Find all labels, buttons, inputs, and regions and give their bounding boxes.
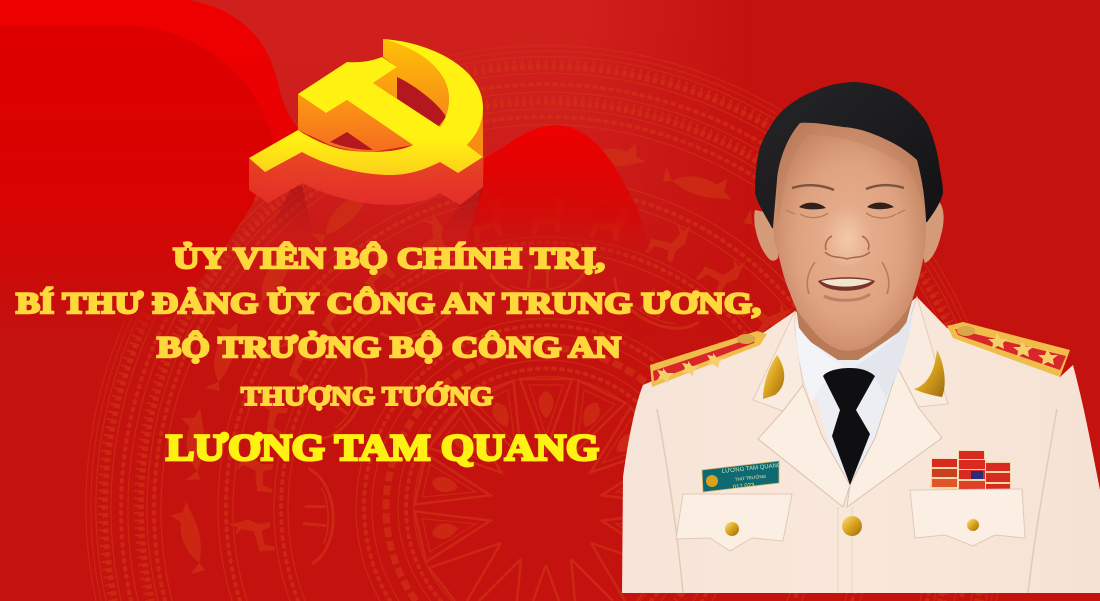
right epaulette (947, 322, 1070, 377)
title line 2: BÍ THƯ ĐẢNG ỦY CÔNG AN TRUNG ƯƠNG, (16, 287, 761, 320)
shirt collar (795, 322, 844, 402)
name plate: 017.023 (733, 483, 755, 491)
portrait (622, 82, 1100, 593)
face (773, 123, 926, 351)
nose highlight (822, 198, 872, 266)
collar insignia right (914, 350, 945, 397)
title line 1: ỦY VIÊN BỘ CHÍNH TRỊ, (173, 242, 605, 275)
eye wrinkles (786, 210, 905, 218)
name plate (702, 461, 782, 492)
hammer sides (298, 94, 413, 152)
drum pattern: bronze drum rings (86, 46, 1006, 601)
neck (795, 290, 915, 360)
dark openings (397, 77, 446, 127)
name: LƯƠNG TAM QUANG (166, 428, 599, 469)
ears (754, 210, 780, 261)
rank line: THƯỢNG TƯỚNG (241, 382, 493, 411)
tie (823, 368, 875, 485)
left pocket flap (676, 494, 792, 551)
front extrusion (249, 152, 483, 205)
decorative red waves (0, 0, 655, 340)
forehead shade under hair (777, 123, 926, 220)
icon: hammer and sickle emblem (249, 39, 483, 236)
sleeve seams (657, 409, 683, 593)
name plate: LƯƠNG TAM QUANG (722, 463, 782, 475)
collar insignia left (763, 355, 784, 399)
medal ribbons (930, 450, 1011, 495)
mouth (818, 277, 875, 291)
right collar and lapel (898, 297, 948, 407)
title block (16, 242, 761, 469)
buttons (725, 516, 979, 536)
right pocket flap (910, 489, 1025, 546)
left epaulette (650, 331, 767, 387)
eyes (799, 203, 826, 209)
sickle right side (467, 107, 483, 157)
shirt (793, 300, 918, 490)
name plate: THỨ TRƯỞNG (734, 473, 767, 482)
jacket (622, 297, 1100, 593)
nose (825, 236, 870, 259)
reflection below emblem (249, 185, 483, 236)
title line 3: BỘ TRƯỞNG BỘ CÔNG AN (157, 331, 621, 364)
background (191, 0, 648, 230)
eyebrows (792, 185, 834, 190)
sickle inner face (373, 39, 449, 127)
left collar and lapel (753, 311, 803, 411)
cheek folds (807, 262, 889, 294)
top face (249, 39, 483, 175)
hair back (755, 82, 943, 240)
